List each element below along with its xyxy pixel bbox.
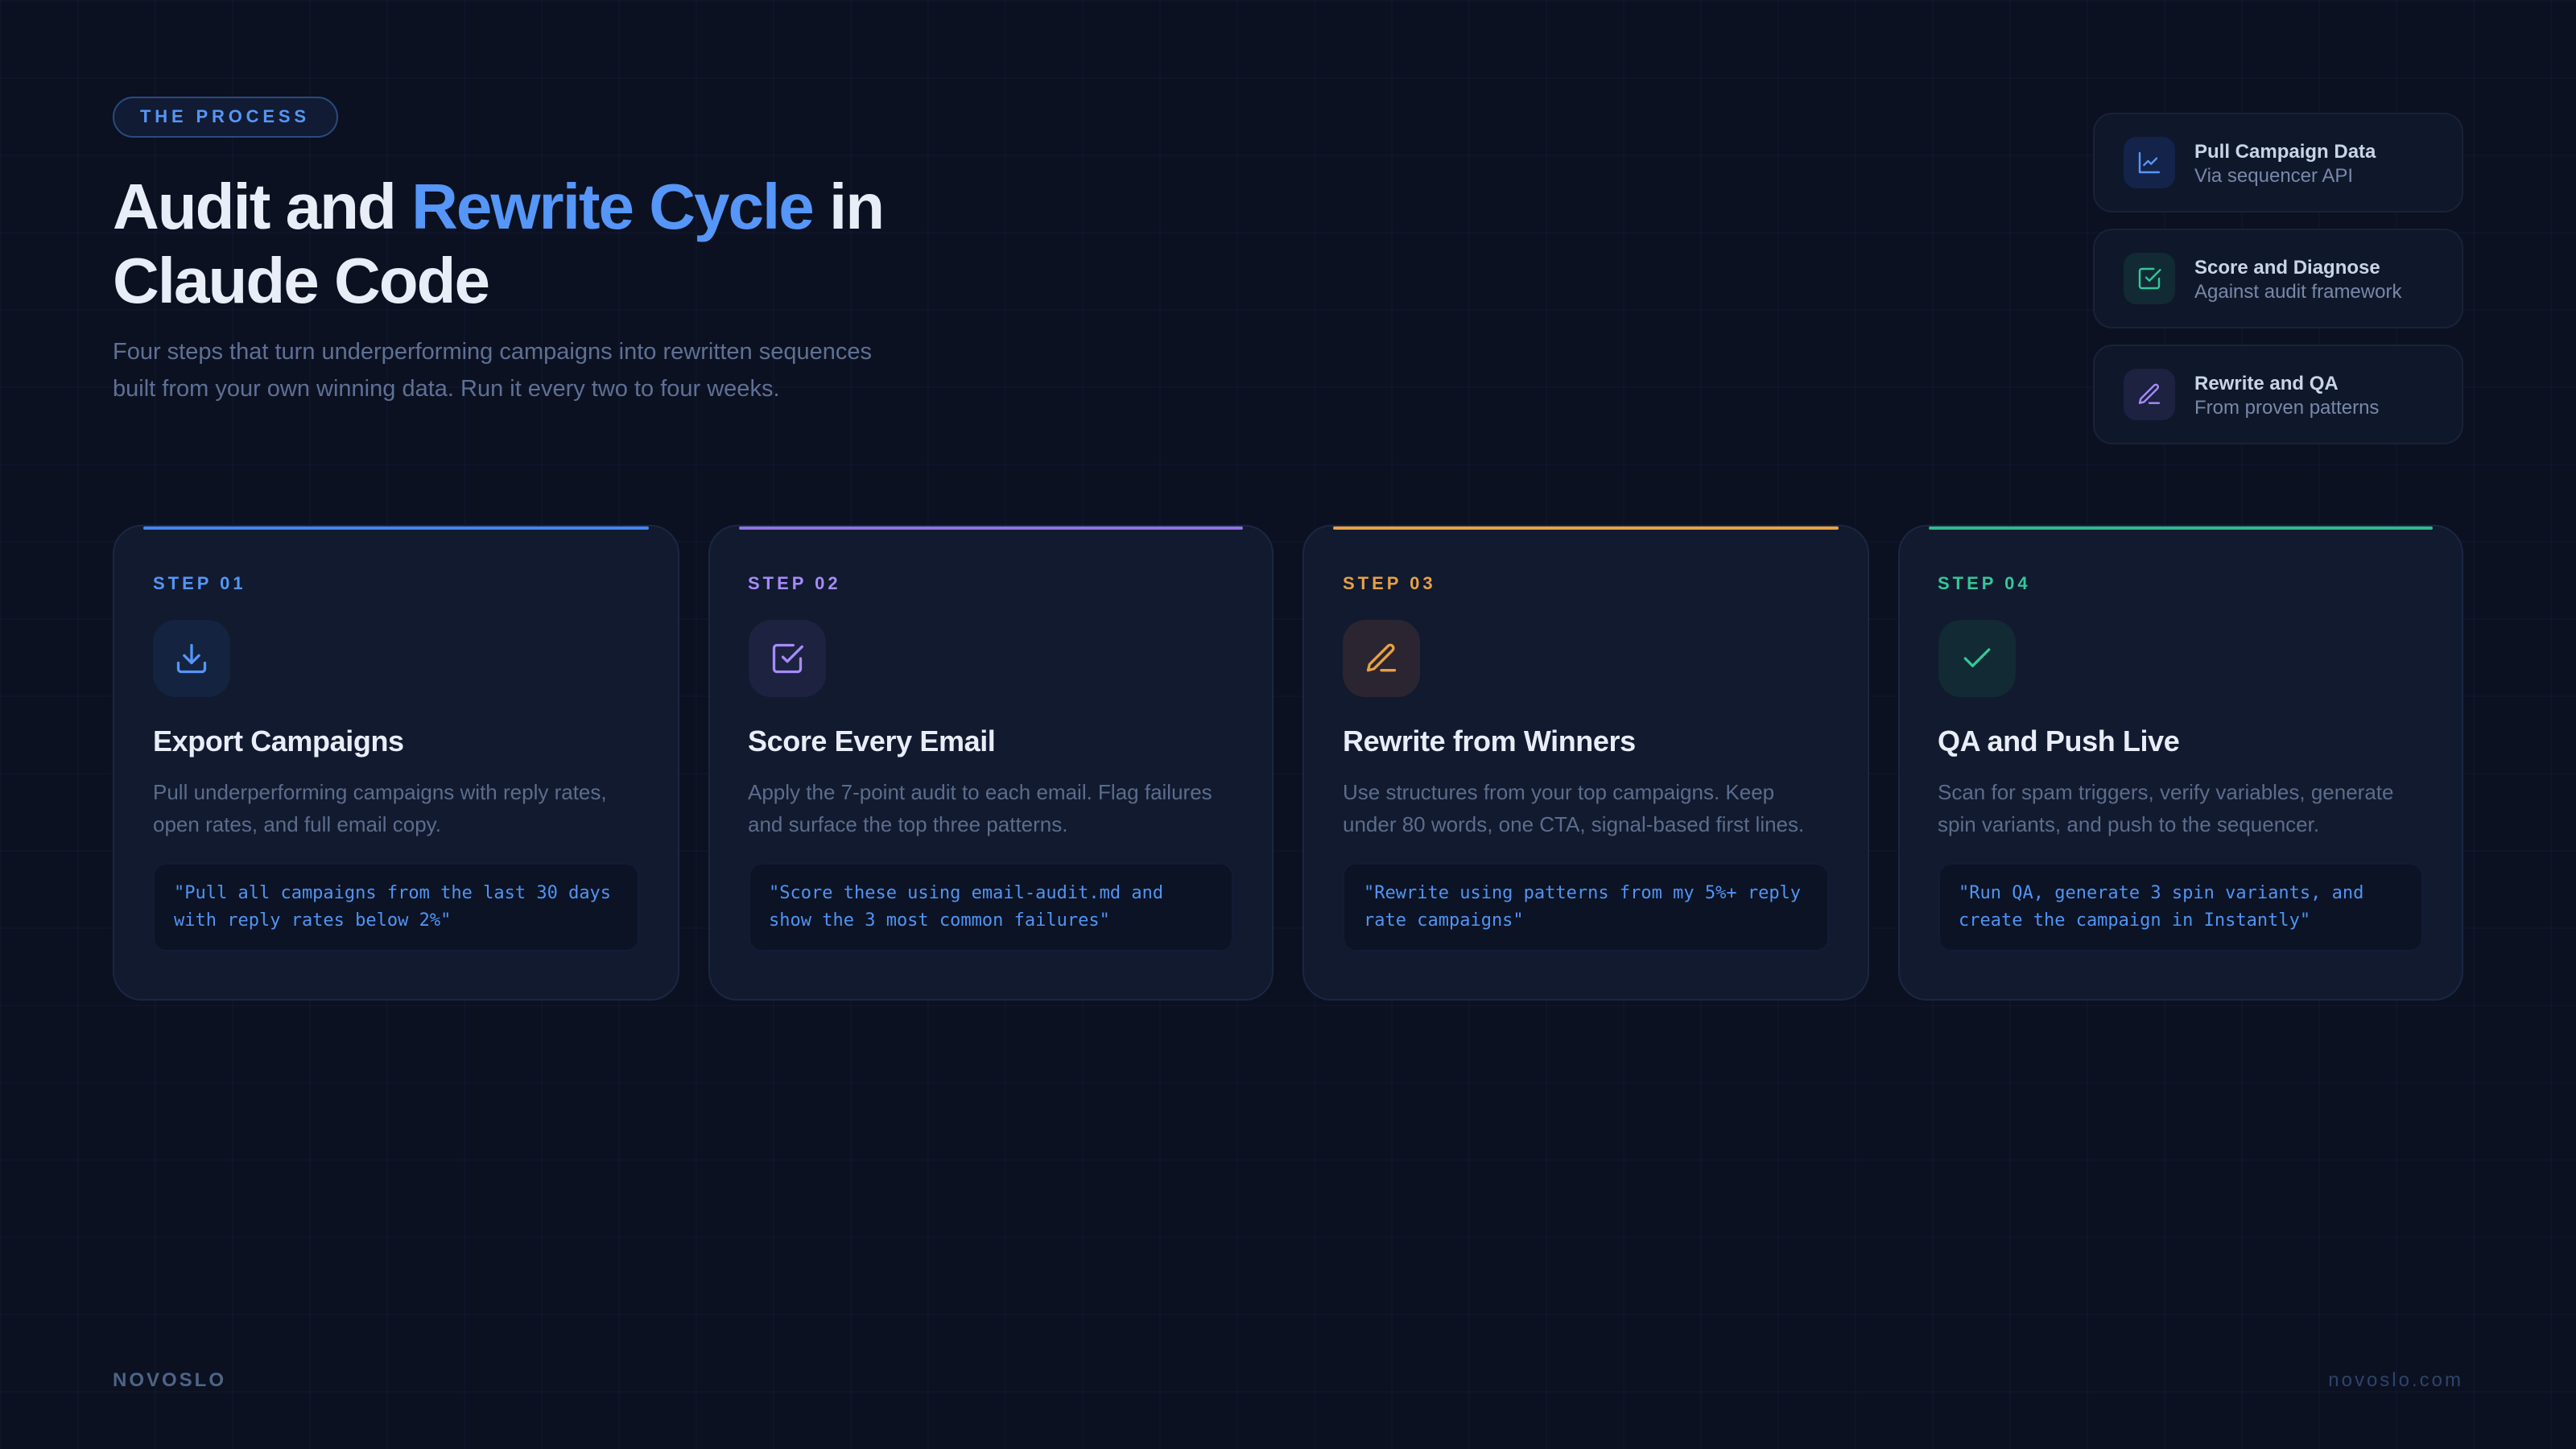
card title: Export Campaigns	[153, 724, 404, 758]
sublabel: against audit framework: Against audit framework	[2194, 281, 2401, 303]
prompt box: create the campaign in Instantly"	[1959, 910, 2310, 931]
icon: line chart	[2124, 137, 2175, 188]
footer: brand: NOVOSLO	[113, 1369, 226, 1391]
step label: STEP 03	[1343, 573, 1436, 593]
icon: pen	[2124, 369, 2175, 420]
badge: the process	[113, 97, 338, 138]
step label: STEP 01	[153, 573, 246, 593]
subtitle: built from your own winning data. Run it every two to four weeks.	[113, 376, 779, 402]
prompt box: "Pull all campaigns from the last 30 days	[174, 883, 611, 903]
label: score and diagnose: Score and Diagnose	[2194, 257, 2380, 279]
title	[113, 171, 883, 316]
prompt box	[1343, 863, 1829, 952]
label: pull campaign data: Pull Campaign Data	[2194, 141, 2376, 163]
card description: Scan for spam triggers, verify variables, generate	[1938, 780, 2393, 804]
panel: step 02	[708, 525, 1274, 1001]
card title: Rewrite from Winners	[1343, 724, 1636, 758]
icon: check square	[749, 620, 826, 697]
card description	[748, 780, 1212, 836]
accent bar: purple	[739, 526, 1243, 530]
prompt box	[1938, 863, 2423, 952]
prompt box: show the 3 most common failures"	[769, 910, 1110, 931]
label: rewrite and qa: Rewrite and QA	[2194, 373, 2339, 394]
icon: check square	[2124, 253, 2175, 304]
step label: STEP 04	[1938, 573, 2031, 593]
sublabel: via sequencer api: Via sequencer API	[2194, 165, 2353, 187]
icon: pen	[1343, 620, 1420, 697]
prompt box: "Rewrite using patterns from my 5%+ reply	[1364, 883, 1801, 903]
panel: step 01	[113, 525, 679, 1001]
accent bar: blue	[143, 526, 649, 530]
prompt box: with reply rates below 2%"	[174, 910, 451, 931]
card description	[1938, 780, 2393, 836]
card title: Score Every Email	[748, 724, 995, 758]
card description	[1343, 780, 1804, 836]
subtitle	[113, 339, 872, 402]
panel: rewrite and qa	[2093, 345, 2463, 444]
icon: check	[1938, 620, 2016, 697]
title: Audit and Rewrite Cycle in	[113, 171, 883, 242]
icon: download	[153, 620, 230, 697]
card description	[153, 780, 607, 836]
subtitle: Four steps that turn underperforming campaigns into rewritten sequences	[113, 339, 872, 365]
panel: step 04	[1898, 525, 2463, 1001]
step label: STEP 02	[748, 573, 841, 593]
panel: pull campaign data	[2093, 113, 2463, 213]
prompt box: rate campaigns"	[1364, 910, 1524, 931]
card description: spin variants, and push to the sequencer.	[1938, 812, 2319, 836]
prompt box	[153, 863, 639, 952]
card title: QA and Push Live	[1938, 724, 2179, 758]
accent bar: orange	[1333, 526, 1839, 530]
title: Claude Code	[113, 245, 489, 316]
badge: the process: THE PROCESS	[140, 106, 310, 126]
card description: Apply the 7-point audit to each email. Flag failures	[748, 780, 1212, 804]
accent bar: green	[1929, 526, 2433, 530]
footer: url: novoslo.com	[2328, 1369, 2463, 1391]
card description: and surface the top three patterns.	[748, 812, 1067, 836]
card description: under 80 words, one CTA, signal-based first lines.	[1343, 812, 1804, 836]
prompt box: "Run QA, generate 3 spin variants, and	[1959, 883, 2363, 903]
card description: Pull underperforming campaigns with reply rates,	[153, 780, 607, 804]
prompt box: "Score these using email-audit.md and	[769, 883, 1163, 903]
sublabel: from proven patterns: From proven patterns	[2194, 397, 2379, 419]
card description: Use structures from your top campaigns. Keep	[1343, 780, 1774, 804]
panel: score and diagnose	[2093, 229, 2463, 328]
card description: open rates, and full email copy.	[153, 812, 441, 836]
panel: step 03	[1302, 525, 1869, 1001]
prompt box	[749, 863, 1233, 952]
